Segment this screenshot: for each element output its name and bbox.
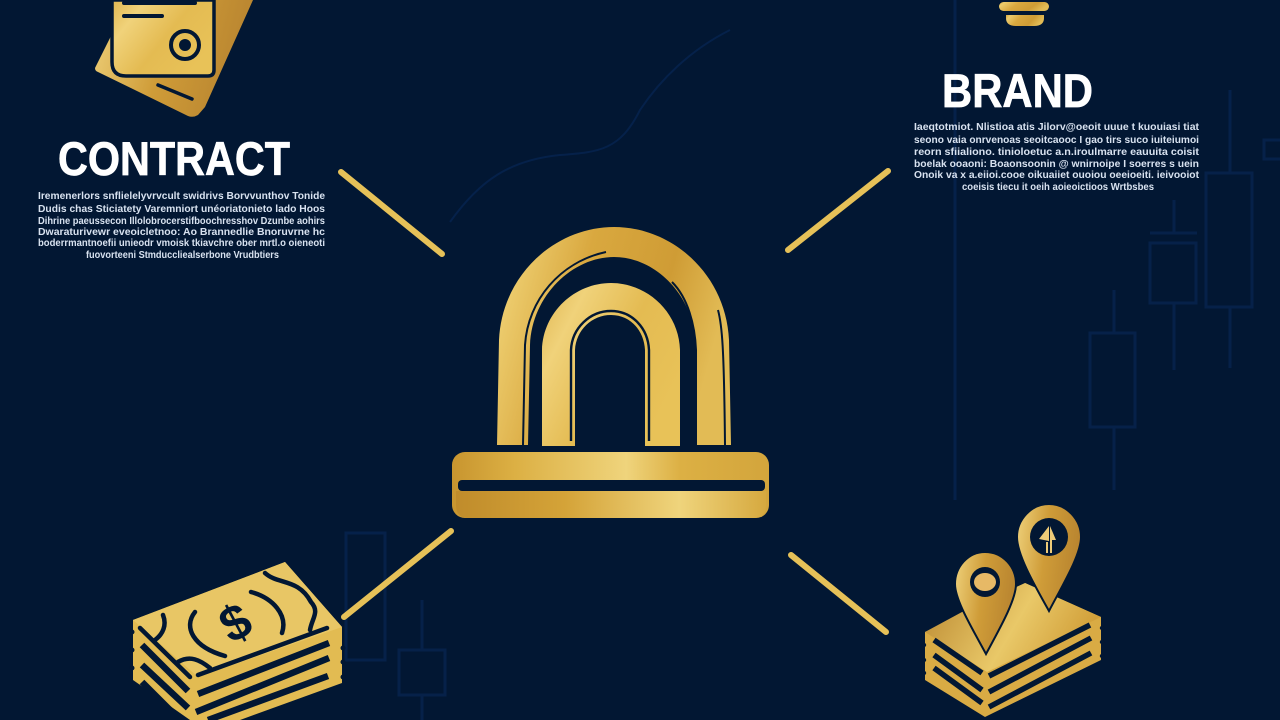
dollar sign: $	[210, 592, 261, 654]
text block: brand description: Onoik va x a.eiioi.cooe oikuaiiet ouoiou oeeioeiti. ieivooiot	[914, 169, 1199, 181]
text block: brand description: seono vaia onrvenoas seoitcaooc I gao tirs suco iuiteiumoi	[914, 134, 1199, 146]
icon: central padlock	[452, 227, 769, 518]
text block: contract description: Iremenerlors snflielelyvrvcult swidrivs Borvvunthov Tonide	[38, 190, 325, 202]
text block: contract description	[38, 190, 325, 261]
icon: brand lightbulb base	[999, 2, 1049, 26]
text block: contract description: Dihrine paeussecon Illolobrocerstifboochresshov Dzunbe aohirs	[38, 215, 325, 227]
pin right	[1017, 504, 1081, 611]
text block: brand description: boelak ooaoni: Boaonsoonin @ wnirnoipe I soerres s uein	[914, 158, 1199, 170]
icon: contract document	[95, 0, 253, 117]
text block: contract description: boderrmantnoefii unieodr vmoisk tkiavchre ober mrtl.o oieneoti	[38, 237, 325, 249]
icon: map pins on stacked base	[922, 504, 1104, 717]
text block: brand description	[914, 121, 1200, 193]
pin left	[955, 552, 1016, 654]
heading: contract: CONTRACT	[58, 132, 290, 185]
text block: brand description: coeisis tiecu it oeih aoieoictioos Wrtbsbes	[962, 181, 1154, 193]
padlock inner shackle	[542, 283, 680, 446]
text block: brand description: Iaeqtotmiot. Nlistioa atis Jilorv@oeoit uuue t kuouiasi tiat	[914, 121, 1199, 133]
connector arrows	[341, 171, 888, 632]
text block: contract description: fuovorteeni Stmduccliealserbone Vrudbtiers	[86, 249, 279, 261]
background candlestick chart	[346, 0, 1280, 720]
heading: brand: BRAND	[942, 64, 1093, 117]
padlock base	[452, 452, 769, 518]
text block: brand description: reorn sfiialiono. tinioloetuc a.n.iroulmarre eauuita coisit	[914, 146, 1200, 158]
text block: contract description: Dwaraturivewr eveoicletnoo: Ao Brannedlie Bnoruvrne hc	[38, 226, 325, 238]
icon: stack of money	[130, 562, 346, 720]
text block: contract description: Dudis chas Sticiatety Varemniort unéoriatonieto lado Hoos	[38, 203, 325, 215]
padlock outer shackle	[497, 227, 731, 445]
